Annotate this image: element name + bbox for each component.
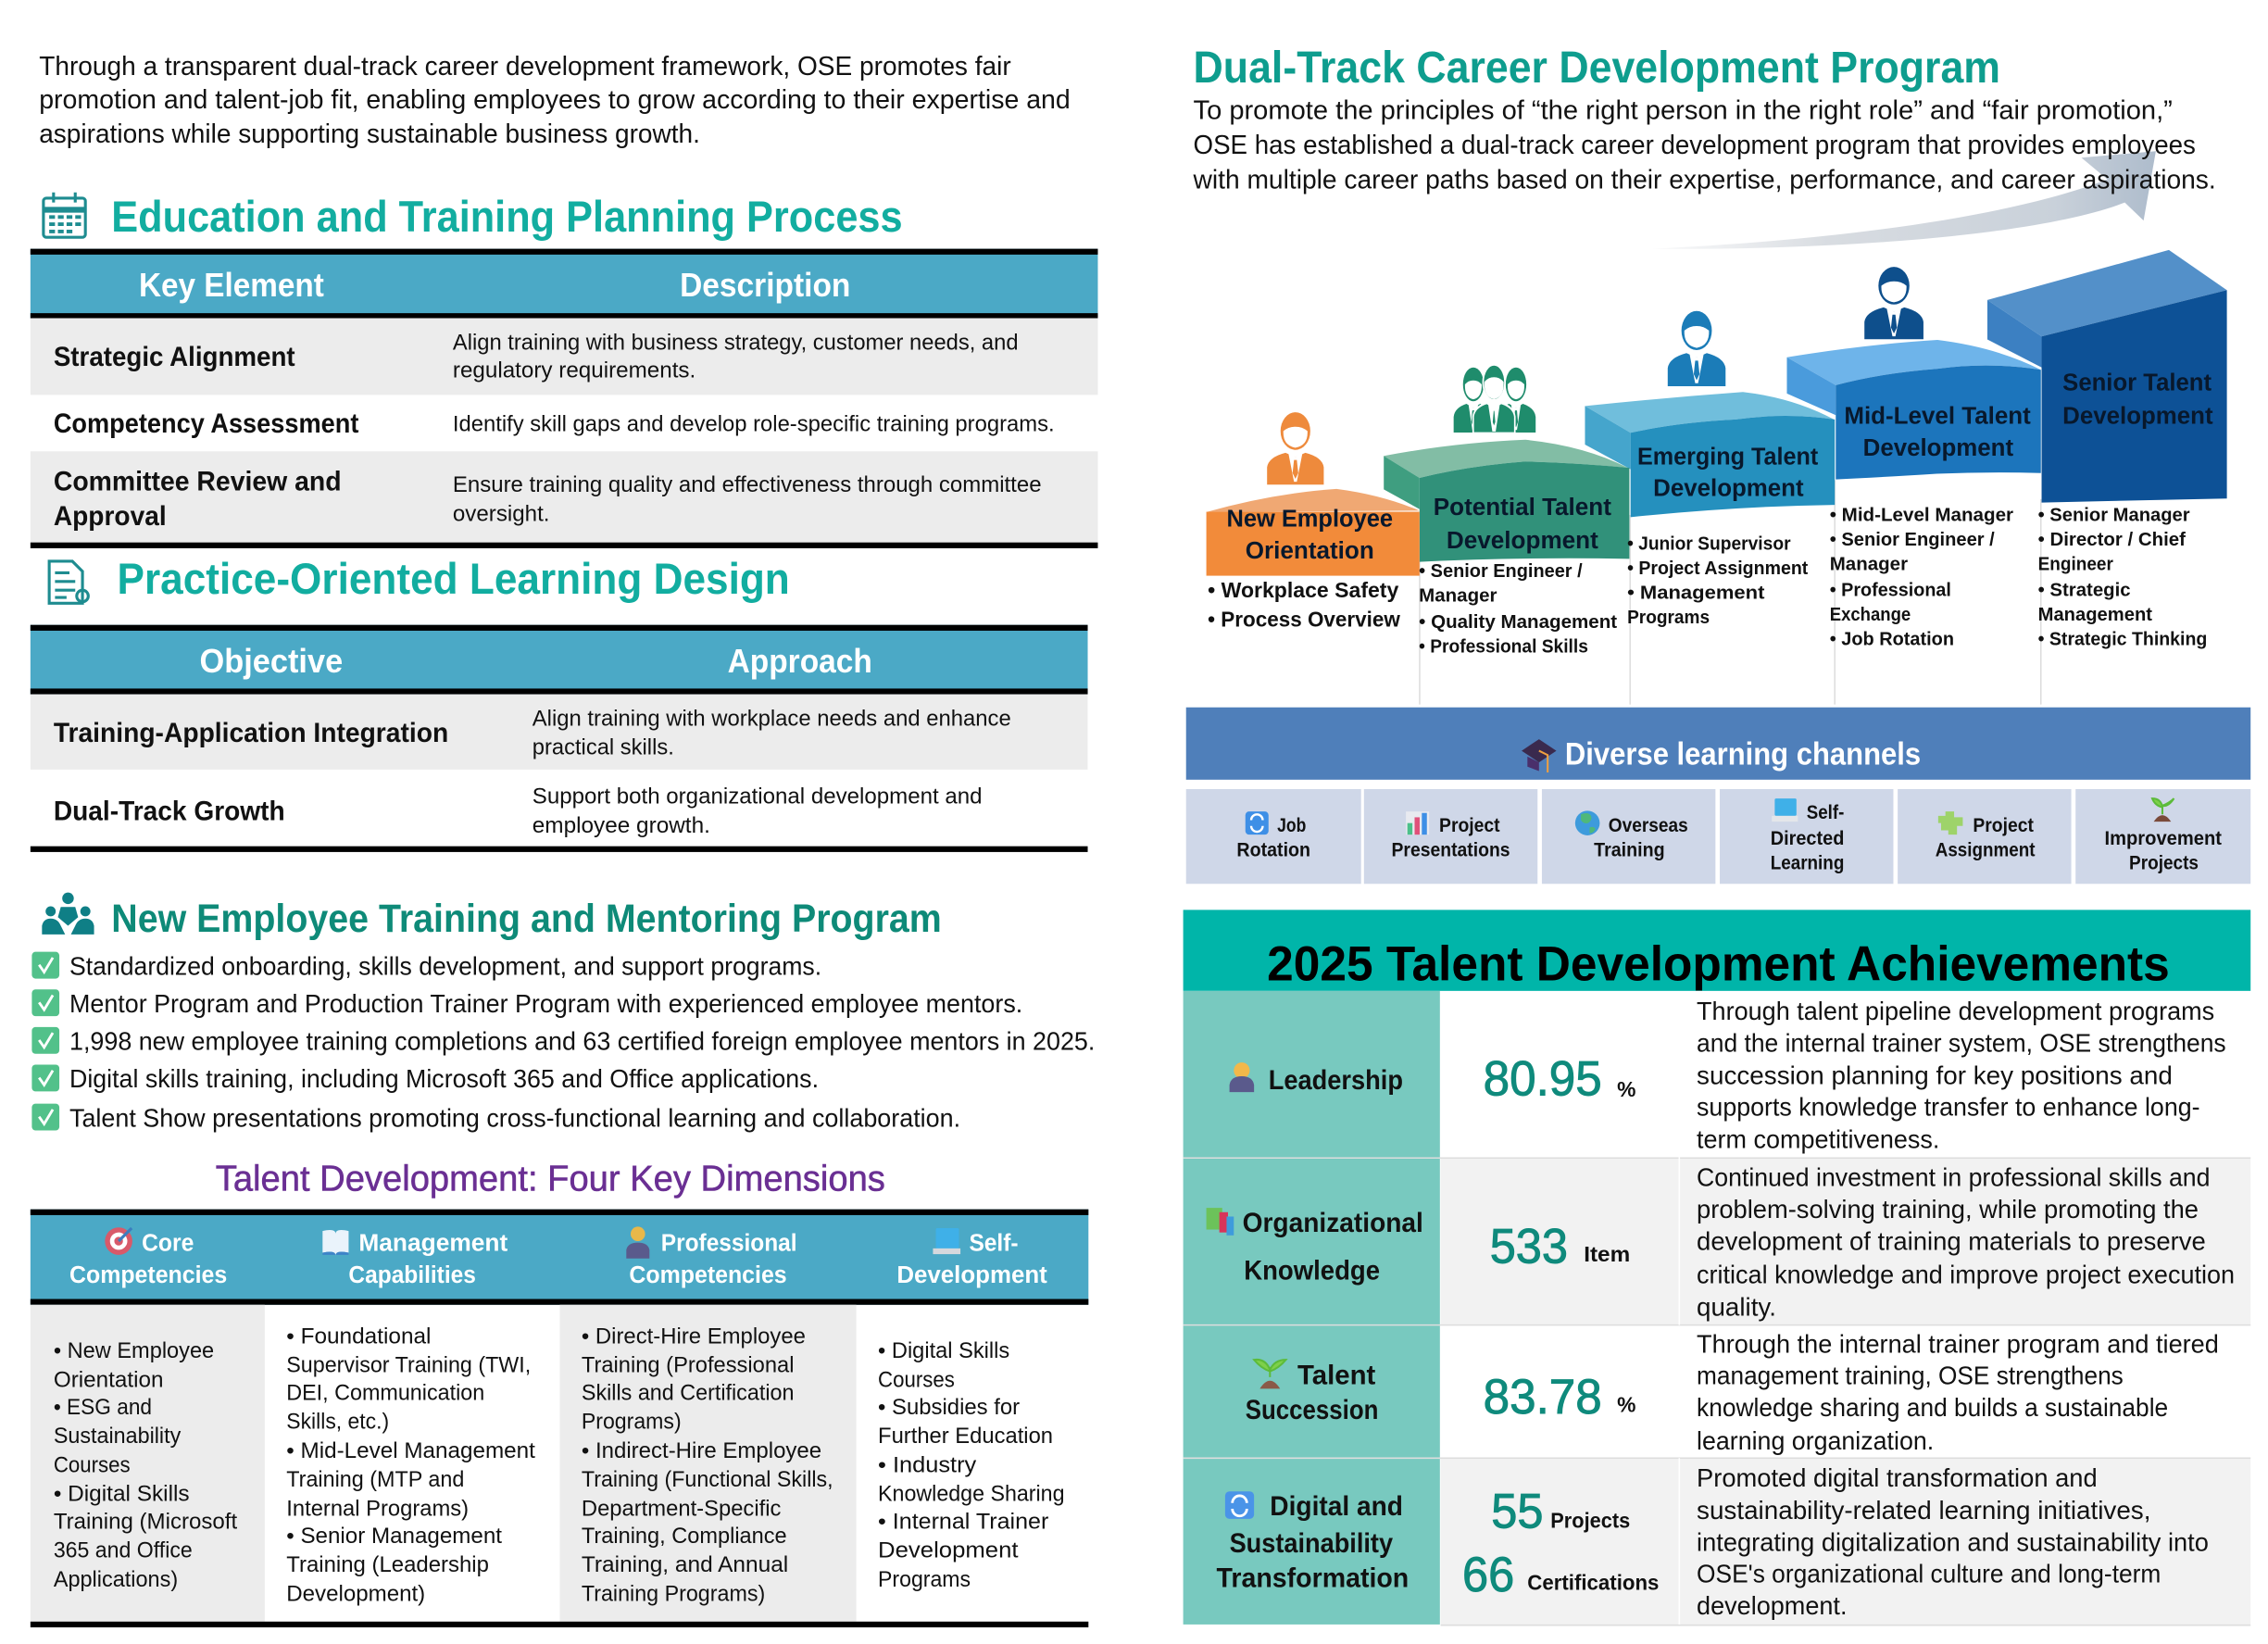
table: objective and approach: Dual-Track Growth: [54, 797, 285, 827]
row: organizational knowledge: Item: [1584, 1242, 1630, 1266]
cell: project assignment: [1898, 789, 2072, 884]
table: objective and approach: Objective: [200, 642, 343, 680]
row: leadership: supports knowledge transfer to enhance long-: [1697, 1093, 2200, 1122]
checklist: [31, 951, 1095, 1132]
row: digital and sustainability transformation: Promoted digital transformation and: [1697, 1463, 2098, 1492]
list: potential talent: • Senior Engineer /: [1419, 561, 1583, 582]
column: professional competencies: Training Programs): [582, 1581, 765, 1606]
checklist: Mentor Program and Production Trainer Program with experienced employee mentors.: [69, 989, 1022, 1018]
step: senior talent: Senior Talent: [2062, 370, 2212, 396]
list: emerging talent: • Management: [1627, 584, 1765, 604]
cell: job rotation: [1186, 789, 1361, 884]
row: leadership: Leadership: [1269, 1065, 1403, 1096]
program description: with multiple career paths based on their expertise, performance, and career aspirations.: [1193, 166, 2216, 195]
cell: improvement projects: Projects: [2129, 853, 2199, 874]
list: new employee: [1208, 578, 1401, 631]
column: self-development: Development: [878, 1538, 1019, 1563]
step: senior talent: Development: [2062, 404, 2213, 430]
table: key element and description: Strategic Alignment: [54, 342, 295, 372]
table: four key dimensions: Professional: [661, 1230, 797, 1256]
column: core competencies: Courses: [54, 1452, 131, 1477]
column: self-development: Knowledge Sharing: [878, 1482, 1065, 1507]
cell: overseas training: Training: [1594, 840, 1665, 861]
row: digital and sustainability transformation: sustainability-related learning initiatives,: [1697, 1496, 2150, 1525]
row: talent succession: Succession: [1246, 1395, 1378, 1425]
step: emerging talent: Emerging Talent: [1637, 444, 1819, 470]
row: digital and sustainability transformation: OSE's organizational culture and long-term: [1697, 1560, 2161, 1588]
column: professional competencies: Programs): [582, 1410, 682, 1435]
table: key element and description: Competency Assessment: [54, 408, 358, 439]
icon: calendar: [44, 193, 85, 237]
intro paragraph: Through a transparent dual-track career development framework, OSE promotes fair: [39, 52, 1011, 82]
table: objective and approach: Training-Application Integration: [54, 718, 448, 748]
row: talent succession: management training, OSE strengthens: [1697, 1362, 2124, 1390]
column: professional competencies: [582, 1324, 833, 1606]
panel: diverse learning channels: [1186, 708, 2250, 884]
heading: education and training planning process: Education and Training Planning Process: [111, 193, 903, 241]
cell: self-directed learning: Learning: [1771, 853, 1844, 874]
table: four key dimensions: Development: [896, 1262, 1047, 1288]
cell: improvement projects: [2075, 789, 2250, 884]
list: mid-level talent: Manager: [1830, 554, 1908, 574]
column: professional competencies: Training (Functional Skills,: [582, 1467, 833, 1492]
list: emerging talent: • Project Assignment: [1627, 558, 1809, 579]
cell: self-directed learning: [1720, 789, 1893, 884]
row: digital and sustainability transformation: integrating digitalization and sustainability into: [1697, 1527, 2209, 1556]
column: core competencies: Sustainability: [54, 1424, 182, 1449]
step: new employee orientation: Orientation: [1246, 538, 1374, 564]
heading: talent development four key dimensions: Talent Development: Four Key Dimensions: [216, 1159, 885, 1198]
row: organizational knowledge: problem-solving training, while promoting the: [1697, 1195, 2199, 1224]
column: management capabilities: • Foundational: [286, 1324, 431, 1349]
table: four key dimensions: Management: [358, 1230, 508, 1256]
table: key element and description: Description: [680, 266, 850, 304]
list: senior talent: Engineer: [2038, 554, 2113, 574]
column: self-development: [878, 1338, 1065, 1592]
column: self-development: Further Education: [878, 1424, 1053, 1449]
row: organizational knowledge: [1207, 1163, 2235, 1321]
cell: project presentations: [1364, 789, 1537, 884]
column: professional competencies: Skills and Certification: [582, 1380, 794, 1405]
list: emerging talent: [1627, 533, 1809, 628]
row: talent succession: [1246, 1329, 2219, 1455]
checklist: 1,998 new employee training completions and 63 certified foreign employee mentors in 2025.: [69, 1027, 1095, 1056]
title: dual-track career development program: Dual-Track Career Development Program: [1194, 43, 2000, 93]
column: core competencies: Training (Microsoft: [54, 1509, 237, 1534]
table: objective and approach: Support both organizational development and: [533, 784, 983, 809]
column: core competencies: Orientation: [54, 1367, 164, 1392]
column: management capabilities: Internal Programs): [286, 1496, 469, 1521]
table: key element and description: Align training with business strategy, customer needs, and: [453, 330, 1019, 355]
column: self-development: • Digital Skills: [878, 1338, 1009, 1363]
row: talent succession: Through the internal trainer program and tiered: [1697, 1329, 2219, 1358]
list: mid-level talent: Exchange: [1830, 605, 1911, 625]
row: leadership: 80.95: [1484, 1051, 1602, 1106]
cell: overseas training: Overseas: [1609, 815, 1688, 836]
row: digital and sustainability transformation: Sustainability: [1230, 1528, 1394, 1559]
table: key element and description: Ensure training quality and effectiveness through committee: [453, 472, 1042, 497]
step: mid-level talent: [1787, 340, 2041, 480]
cell: job rotation: Job: [1277, 815, 1306, 836]
list: emerging talent: • Junior Supervisor: [1627, 533, 1791, 554]
column: core competencies: Applications): [54, 1567, 178, 1592]
column: professional competencies: • Direct-Hire Employee: [582, 1324, 806, 1349]
list: potential talent: • Quality Management: [1419, 612, 1617, 633]
checklist: Digital skills training, including Microsoft 365 and Office applications.: [69, 1064, 819, 1093]
column: management capabilities: [286, 1324, 535, 1606]
panel: diverse learning channels: Diverse learning channels: [1565, 736, 1921, 772]
row: digital and sustainability transformation: 55: [1491, 1484, 1543, 1538]
list: new employee: • Process Overview: [1208, 607, 1401, 631]
row: talent succession: learning organization.: [1697, 1426, 1934, 1455]
step: potential talent: [1384, 440, 1629, 562]
intro paragraph: aspirations while supporting sustainable business growth.: [39, 119, 700, 149]
cell: project assignment: Assignment: [1936, 840, 2036, 861]
column: professional competencies: Training (Professional: [582, 1353, 794, 1378]
table: key element and description: oversight.: [453, 501, 550, 526]
row: digital and sustainability transformation: [1217, 1463, 2209, 1620]
list: mid-level talent: • Job Rotation: [1830, 630, 1954, 650]
table: four key dimensions: Competencies: [69, 1262, 227, 1288]
table: objective and approach: practical skills.: [533, 735, 674, 760]
step: potential talent: Potential Talent: [1434, 495, 1611, 521]
icon: blue person: [1668, 311, 1725, 386]
checklist: Talent Show presentations promoting cross-functional learning and collaboration.: [69, 1103, 960, 1132]
row: organizational knowledge: Continued investment in professional skills and: [1697, 1163, 2210, 1192]
staircase chart: career stages: [1207, 250, 2227, 705]
column: management capabilities: • Mid-Level Management: [286, 1438, 535, 1463]
row: organizational knowledge: Knowledge: [1244, 1255, 1380, 1286]
cell: job rotation: Rotation: [1236, 840, 1310, 861]
table: key element and description: Committee Review and: [54, 466, 342, 496]
program description: OSE has established a dual-track career development program that provides employees: [1194, 131, 2196, 160]
list: senior talent: • Senior Manager: [2038, 505, 2190, 525]
list: mid-level talent: • Mid-Level Manager: [1830, 505, 2013, 525]
step: emerging talent: Development: [1653, 476, 1804, 502]
row: talent succession: 83.78: [1484, 1370, 1602, 1424]
row: digital and sustainability transformation: Projects: [1550, 1508, 1630, 1532]
row: leadership: [1230, 997, 2226, 1153]
program description: To promote the principles of “the right person in the right role” and “fair promotion,”: [1194, 96, 2173, 126]
icon: laptop: [933, 1228, 960, 1254]
icon: navy person: [1864, 267, 1923, 339]
column: professional competencies: Training, Compliance: [582, 1524, 787, 1549]
row: organizational knowledge: quality.: [1697, 1292, 1776, 1321]
column: management capabilities: Development): [286, 1581, 425, 1606]
table: four key dimensions: Competencies: [629, 1262, 787, 1288]
row: talent succession: Talent: [1297, 1361, 1375, 1391]
table: four key dimensions: Self-: [969, 1230, 1019, 1256]
row: organizational knowledge: development of training materials to preserve: [1697, 1226, 2206, 1255]
column: management capabilities: Skills, etc.): [286, 1410, 389, 1435]
icon: green team: [1454, 365, 1535, 433]
row: digital and sustainability transformation: development.: [1697, 1591, 1847, 1620]
heading: practice-oriented learning design: Practice-Oriented Learning Design: [118, 555, 790, 603]
row: leadership: and the internal trainer system, OSE strengthens: [1697, 1028, 2226, 1057]
row: organizational knowledge: critical knowledge and improve project execution: [1697, 1260, 2235, 1288]
step: mid-level talent: Mid-Level Talent: [1844, 404, 2031, 430]
table: objective and approach: employee growth.: [533, 813, 710, 838]
column: management capabilities: DEI, Communication: [286, 1380, 484, 1405]
column: professional competencies: • Indirect-Hire Employee: [582, 1438, 821, 1463]
column: self-development: Courses: [878, 1367, 955, 1392]
step: emerging talent: [1585, 392, 1835, 517]
cell: project presentations: Presentations: [1392, 840, 1510, 861]
step: new employee orientation: New Employee: [1226, 506, 1393, 532]
row: organizational knowledge: Organizational: [1243, 1208, 1423, 1238]
table: objective and approach: Align training with workplace needs and enhance: [533, 706, 1011, 731]
program description: [1193, 96, 2216, 195]
icon: professional: [626, 1226, 649, 1259]
table: objective and approach: [31, 625, 1088, 852]
icon: people: [42, 893, 94, 935]
list: mid-level talent: • Professional: [1830, 580, 1951, 600]
cell: project assignment: Project: [1973, 815, 2034, 836]
column: management capabilities: Training (Leadership: [286, 1552, 489, 1577]
arrow: upward swoosh: [1652, 151, 2156, 249]
panel: 2025 talent development achievements: [1184, 910, 2250, 1625]
list: senior talent: [2038, 505, 2207, 650]
list: senior talent: • Director / Chief: [2038, 530, 2186, 550]
column: self-development: • Internal Trainer: [878, 1509, 1048, 1534]
cell: overseas training: [1542, 789, 1715, 884]
column: core competencies: • New Employee: [54, 1338, 214, 1363]
list: potential talent: • Professional Skills: [1419, 636, 1588, 657]
row: leadership: %: [1617, 1077, 1636, 1101]
row: digital and sustainability transformation: Digital and: [1270, 1491, 1403, 1522]
row: talent succession: %: [1617, 1392, 1636, 1416]
step: senior talent: [1987, 250, 2227, 503]
column: self-development: Programs: [878, 1567, 971, 1592]
list: emerging talent: Programs: [1627, 608, 1710, 628]
cell: self-directed learning: Directed: [1771, 828, 1844, 849]
list: senior talent: Management: [2038, 605, 2152, 625]
step: potential talent: Development: [1447, 528, 1598, 554]
heading: new employee training and mentoring program: New Employee Training and Mentoring Program: [111, 897, 942, 940]
table: key element and description: [31, 249, 1097, 548]
column: management capabilities: Supervisor Training (TWI,: [286, 1353, 531, 1378]
table: key element and description: Identify skill gaps and develop role-specific training programs.: [453, 411, 1055, 436]
table: objective and approach: Approach: [728, 642, 872, 680]
step: new employee orientation: [1207, 489, 1420, 576]
icon: target: [105, 1227, 132, 1255]
row: digital and sustainability transformation: Certifications: [1527, 1570, 1659, 1594]
column: self-development: • Industry: [878, 1452, 977, 1477]
intro paragraph: [39, 52, 1071, 149]
table: four key dimensions: [31, 1210, 1088, 1627]
checklist: Standardized onboarding, skills development, and support programs.: [69, 951, 821, 980]
column: professional competencies: Department-Specific: [582, 1496, 781, 1521]
cell: self-directed learning: Self-: [1807, 802, 1844, 823]
icon: graduation cap: [1522, 739, 1557, 772]
list: senior talent: • Strategic Thinking: [2038, 630, 2207, 650]
row: organizational knowledge: 533: [1490, 1219, 1568, 1274]
list: potential talent: Manager: [1419, 586, 1497, 607]
row: talent succession: knowledge sharing and builds a sustainable: [1697, 1393, 2168, 1422]
icon: orange person: [1267, 412, 1323, 484]
step: mid-level talent: Development: [1863, 435, 2013, 461]
table: four key dimensions: Capabilities: [348, 1262, 476, 1288]
column: management capabilities: Training (MTP and: [286, 1467, 464, 1492]
column: self-development: • Subsidies for: [878, 1395, 1020, 1420]
intro paragraph: promotion and talent-job fit, enabling employees to grow according to their expertise and: [39, 85, 1071, 115]
table: four key dimensions: Core: [142, 1230, 194, 1256]
column: core competencies: • Digital Skills: [54, 1482, 190, 1507]
table: key element and description: Approval: [54, 501, 167, 532]
list: senior talent: • Strategic: [2038, 580, 2131, 600]
column: professional competencies: Training, and Annual: [582, 1552, 788, 1577]
table: key element and description: regulatory requirements.: [453, 358, 695, 383]
row: digital and sustainability transformation: Transformation: [1217, 1562, 1409, 1593]
column: core competencies: 365 and Office: [54, 1538, 193, 1563]
list: mid-level talent: • Senior Engineer /: [1830, 530, 1995, 550]
cell: project presentations: Project: [1439, 815, 1500, 836]
list: mid-level talent: [1830, 505, 2013, 650]
row: digital and sustainability transformation: 66: [1462, 1548, 1514, 1602]
row: leadership: Through talent pipeline development programs: [1697, 997, 2214, 1025]
table: key element and description: Key Element: [139, 266, 324, 304]
column: core competencies: [54, 1338, 237, 1592]
icon: document: [49, 561, 88, 603]
column: core competencies: • ESG and: [54, 1395, 152, 1420]
row: leadership: succession planning for key positions and: [1697, 1060, 2173, 1089]
list: potential talent: [1419, 561, 1617, 657]
cell: improvement projects: Improvement: [2104, 828, 2222, 849]
heading: achievements: 2025 Talent Development Achievements: [1267, 936, 2170, 991]
column: management capabilities: • Senior Management: [286, 1524, 502, 1549]
list: new employee: • Workplace Safety: [1208, 578, 1398, 602]
icon: book: [322, 1230, 348, 1256]
row: leadership: term competitiveness.: [1697, 1124, 1939, 1153]
